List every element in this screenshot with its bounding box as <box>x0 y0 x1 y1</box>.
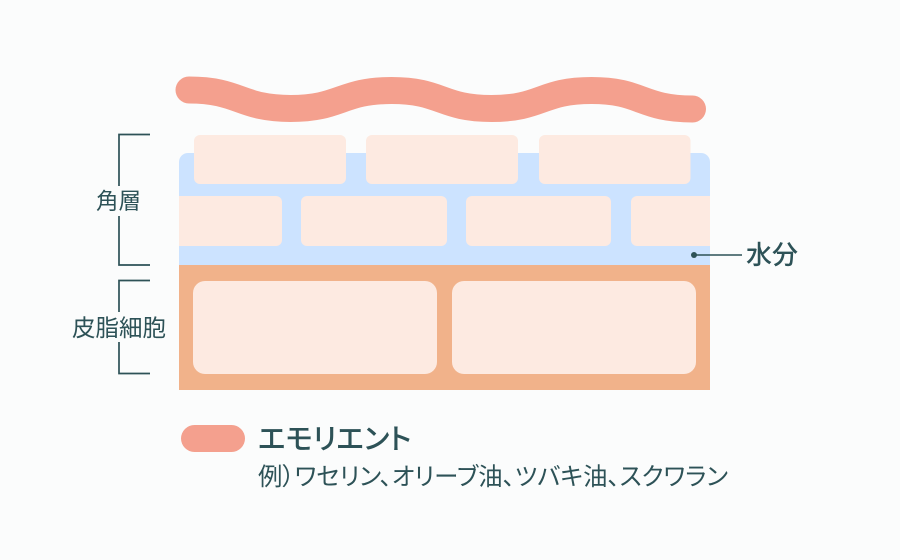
legend examples: 例）ワセリン、オリーブ油、ツバキ油、スクワラン <box>258 464 728 491</box>
bracket: stratum corneum <box>119 134 150 265</box>
water layer <box>179 153 710 265</box>
legend title: エモリエント <box>258 424 411 456</box>
emollient wave <box>189 90 692 109</box>
stratum corneum cells <box>179 135 710 246</box>
label: stratum corneum: 角層 <box>96 189 141 214</box>
label: sebum cells: 皮脂細胞 <box>72 315 166 341</box>
legend swatch <box>181 425 245 452</box>
bracket: sebum cells <box>119 280 150 374</box>
water pointer <box>691 252 742 258</box>
label: water: 水分 <box>746 240 798 270</box>
sebum cell right <box>452 281 696 374</box>
sebum cell layer <box>179 265 710 390</box>
sebum cell left <box>193 281 437 374</box>
